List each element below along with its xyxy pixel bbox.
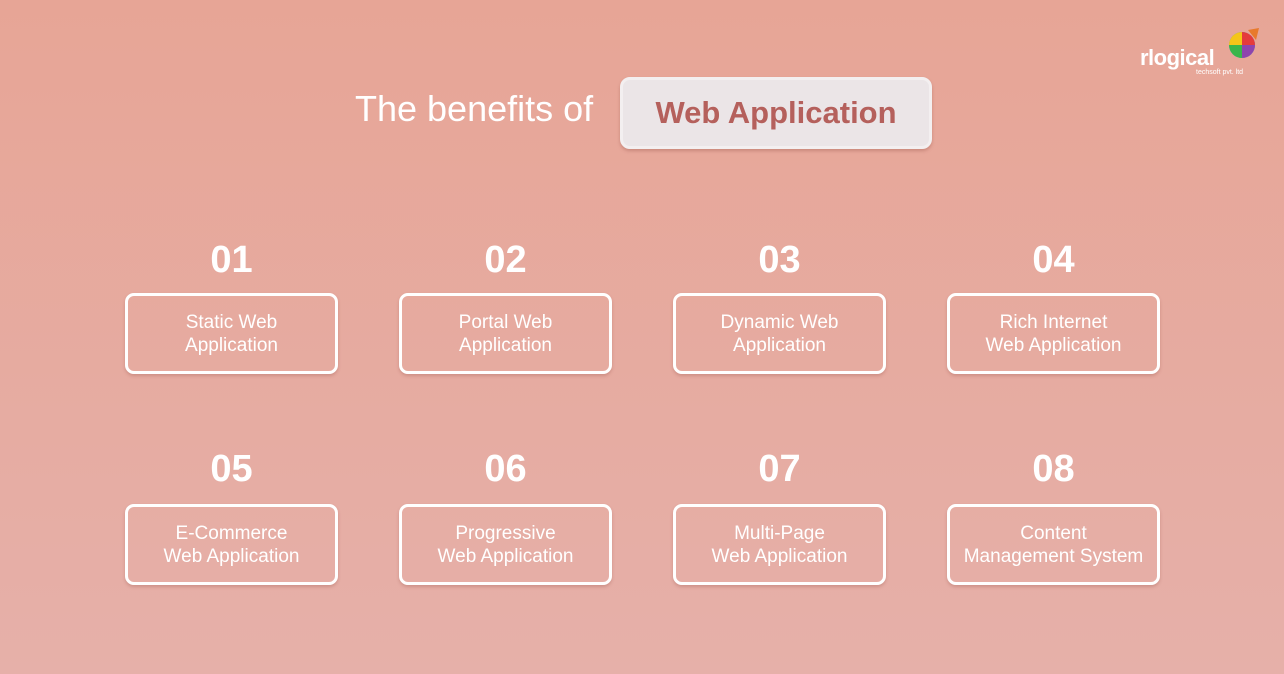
- title pill: Web Application: [655, 95, 897, 130]
- item 08: [946, 448, 1161, 588]
- logo: [1140, 28, 1259, 76]
- item 02: Portal Web: [459, 312, 552, 332]
- item 03: Dynamic Web: [721, 312, 838, 332]
- item 06: Web Application: [438, 546, 573, 566]
- item 05: E-Commerce: [176, 522, 287, 544]
- item 02: Application: [459, 334, 552, 356]
- item 04: Rich Internet: [1000, 312, 1107, 332]
- icon: logo leaf: [1229, 28, 1259, 58]
- logo: techsoft pvt. ltd: [1196, 69, 1243, 76]
- item 01: Application: [185, 334, 278, 356]
- item 07: Web Application: [712, 546, 847, 566]
- item 07: Multi-Page: [734, 522, 825, 544]
- item 03: 03: [758, 239, 801, 281]
- item 04: 04: [1032, 239, 1075, 281]
- item 05: Web Application: [164, 546, 299, 566]
- item 06: 06: [484, 448, 527, 490]
- item 01: Static Web: [186, 312, 277, 332]
- item 01: [124, 239, 339, 377]
- item 01: 01: [210, 239, 253, 281]
- logo text: rlogical: [1140, 45, 1214, 70]
- item 08: Content: [1020, 522, 1087, 544]
- item 06: Progressive: [455, 522, 556, 544]
- item 07: [672, 448, 887, 588]
- item 02: [398, 239, 613, 377]
- item 03: Application: [733, 334, 826, 356]
- item 02: 02: [484, 239, 527, 281]
- item 06: [398, 448, 613, 588]
- item 03: [672, 239, 887, 377]
- item 04: Web Application: [986, 334, 1121, 356]
- item 05: [124, 448, 339, 588]
- title: The benefits of: [355, 88, 593, 129]
- item 07: 07: [758, 448, 801, 490]
- item 08: Management System: [964, 546, 1143, 566]
- item 04: [946, 239, 1161, 377]
- item 08: 08: [1032, 448, 1075, 490]
- title pill: [620, 77, 932, 149]
- item 05: 05: [210, 448, 253, 490]
